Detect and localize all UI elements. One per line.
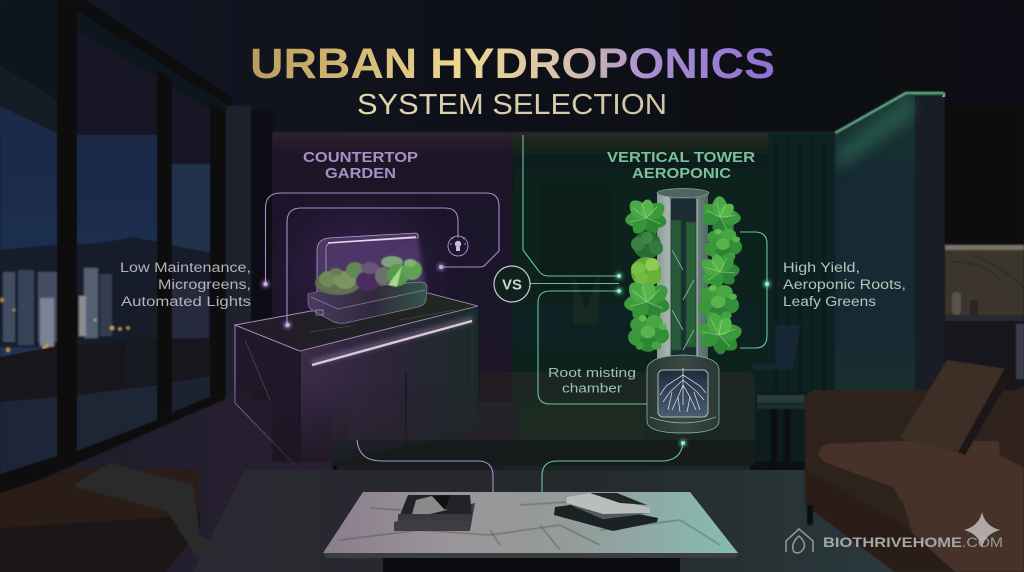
aeroponic tower (647, 188, 719, 433)
countertop features text: Low Maintenance, (120, 260, 251, 275)
heading: countertop garden: GARDEN (325, 165, 396, 182)
colour wash: green side panel (512, 132, 834, 462)
dark green curtain (768, 133, 835, 391)
subtitle: SYSTEM SELECTION (357, 89, 667, 121)
curtains left (226, 106, 273, 400)
bench with throw blanket (0, 463, 222, 572)
watermark: .COM (962, 534, 1003, 550)
countertop cabinet (235, 291, 478, 470)
planter greens (315, 256, 422, 295)
right leather sofa (805, 360, 1024, 572)
colour wash: purple side panel (272, 132, 512, 462)
watermark: BIOTHRIVEHOME (823, 534, 962, 550)
tower features text: High Yield, (783, 260, 860, 275)
green connector lines (523, 135, 767, 492)
heading: vertical tower aeroponic (607, 149, 755, 182)
icon: sparkle (964, 512, 1000, 548)
right wall with green cove light (834, 92, 957, 395)
tower leaves right (690, 188, 750, 363)
VS badge: VS (502, 278, 522, 294)
central divider line (511, 130, 513, 470)
tower features text: Aeroponic Roots, (783, 277, 906, 292)
heading: countertop garden (303, 149, 418, 182)
left stack of books (394, 495, 475, 531)
connector dots green (617, 274, 769, 445)
purple connector lines (266, 193, 499, 492)
ambient glow (290, 210, 830, 380)
countertop features text: Microgreens, (158, 277, 251, 292)
faint wall artwork and chair in green zone (540, 185, 610, 325)
watermark (823, 534, 1003, 550)
heading: countertop garden: COUNTERTOP (303, 149, 418, 166)
tower features text (783, 260, 906, 309)
countertop planter (308, 233, 427, 323)
connector dots purple (263, 265, 443, 327)
chair and side table (753, 325, 805, 469)
center sofa (332, 372, 755, 479)
coffee table (323, 492, 738, 572)
VS badge (494, 266, 530, 302)
icon: brand house leaf (786, 529, 813, 553)
icon: light bulb (448, 236, 468, 256)
heading: vertical tower aeroponic: VERTICAL TOWER (607, 149, 755, 166)
right stack of books (554, 493, 658, 531)
root misting label: chamber (562, 380, 623, 396)
window wall with night city (0, 0, 232, 497)
root system (660, 368, 706, 412)
rug (193, 470, 960, 572)
countertop features text (120, 260, 251, 309)
heading: vertical tower aeroponic: AEROPONIC (632, 165, 731, 182)
tower leaves left (623, 197, 672, 352)
title: URBAN HYDROPONICS (250, 40, 775, 88)
root misting label: Root misting (548, 365, 636, 380)
root misting label (548, 365, 636, 396)
countertop features text: Automated Lights (121, 294, 251, 309)
tower features text: Leafy Greens (783, 294, 876, 309)
kitchen cabinets and backsplash (945, 0, 1024, 396)
